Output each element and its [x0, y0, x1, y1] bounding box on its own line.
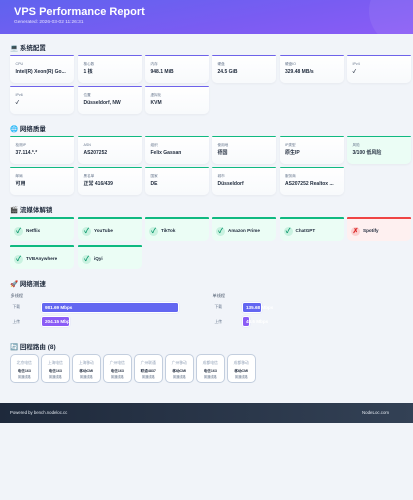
card: IP type: 原生IP	[285, 150, 300, 156]
heading: network quality: 🌐 网络质量	[10, 126, 46, 132]
bar: download: 135.68 Mbps	[246, 304, 273, 310]
card: mail: 邮局	[16, 174, 23, 178]
service: ChatGPT: ✓	[285, 228, 291, 234]
service: Amazon Prime	[212, 217, 276, 241]
route: Shanghai Telecom: 上海电信	[48, 361, 63, 365]
title: VPS Performance Report	[14, 6, 145, 18]
route: Guangzhou Telecom: 广州电信	[110, 361, 125, 365]
route: Shanghai Telecom: 电信163	[49, 368, 62, 372]
card: risk	[347, 136, 411, 164]
card: location: 位置	[84, 92, 91, 96]
service: iQiyi: iQyi	[94, 256, 103, 261]
bar: upload	[242, 316, 250, 327]
heading: speed test: 🚀 网络测速	[10, 281, 46, 288]
card: mail	[10, 166, 74, 194]
route: Chengdu Telecom: 成都电信	[203, 361, 218, 365]
service: Netflix: Netflix	[26, 228, 40, 233]
card: CPU: CPU	[16, 62, 23, 66]
label: upload: 上传	[12, 320, 20, 324]
heading: streaming unlock: 🎬 流媒体解锁	[10, 206, 52, 214]
card: usage location: 使用地	[218, 142, 228, 146]
card: country: 国家	[150, 174, 158, 178]
card: CPU	[10, 54, 74, 82]
panel: network quality	[10, 136, 411, 190]
card: organization: 组织	[150, 142, 158, 146]
card: IP type: IP类型	[285, 142, 296, 146]
card: risk: 3/100 低风险	[352, 150, 381, 156]
card: IPv4: ✓	[352, 68, 356, 74]
card: country	[145, 166, 209, 194]
card: organization: Felix Gassan	[150, 150, 181, 156]
service: Netflix: ✓	[16, 228, 21, 234]
card: blacklist: 正常 416/439	[84, 180, 113, 186]
card: disk: 硬盘	[218, 62, 225, 66]
card: test IP: 37.114.*.*	[16, 150, 37, 156]
route: Chengdu Telecom: 电信163	[204, 368, 217, 372]
card: disk	[212, 54, 276, 82]
footer credit: Powered by bench.nodeloc.cc	[10, 410, 67, 415]
panel: return routes	[10, 354, 256, 383]
label: upload: 上传	[214, 320, 222, 324]
card: virtualization	[145, 86, 209, 114]
route: Chengdu Mobile	[227, 354, 256, 382]
chart: single-thread speed	[212, 293, 273, 328]
card: disk IO	[280, 54, 344, 82]
route: Shanghai Mobile: 移动CMI	[79, 368, 93, 372]
route: Beijing Telecom: 北京电信	[17, 361, 32, 365]
card: ASN: AS207252	[84, 150, 107, 156]
footer brand: NodeLoc.com	[362, 410, 389, 415]
heading: return routes: 🔄 回程路由 (8)	[10, 344, 56, 351]
route: Shanghai Mobile	[72, 354, 100, 382]
service: Spotify blocked: ✗	[353, 228, 358, 234]
card: blacklist	[78, 166, 142, 194]
route: Guangzhou Unicom: 联通4837	[141, 368, 156, 372]
card: IPv4	[347, 54, 411, 82]
card: disk IO: 硬盘IO	[285, 62, 296, 66]
header banner	[0, 0, 413, 34]
service: Netflix	[10, 217, 74, 241]
route: Guangzhou Mobile: 移动CMI	[172, 368, 186, 372]
card: mail: 可用	[16, 180, 26, 186]
service: TVBAnywhere: TVBAnywhere	[26, 256, 57, 261]
generated date: Generated: 2026-03-02 11:26:31	[14, 20, 84, 24]
bar: download	[41, 302, 179, 312]
card: IPv6: ✓	[16, 100, 19, 106]
card: cores: 核心数	[84, 62, 94, 66]
card: IPv6: IPv6	[16, 92, 23, 96]
route: Beijing Telecom: 电信163	[18, 368, 31, 372]
card: disk IO: 329.48 MB/s	[285, 68, 314, 74]
card: location	[78, 86, 142, 114]
service: Spotify blocked	[347, 217, 411, 241]
route: Chengdu Telecom: 普通线路	[204, 374, 217, 378]
route: Guangzhou Telecom: 电信163	[111, 368, 124, 372]
card: usage location: 德国	[218, 150, 228, 156]
route: Beijing Telecom: 普通线路	[18, 374, 31, 378]
card: virtualization: 虚拟化	[150, 92, 161, 96]
service: TikTok: TikTok	[161, 228, 175, 233]
card: test IP	[10, 136, 74, 164]
card: cores	[78, 54, 142, 82]
route: Chengdu Telecom	[196, 354, 224, 382]
route: Beijing Telecom	[10, 354, 38, 382]
bar: upload	[41, 316, 70, 327]
route: Chengdu Mobile: 普通线路	[235, 374, 248, 378]
card: memory: 948.1 MiB	[150, 68, 174, 74]
route: Guangzhou Unicom: 普通线路	[142, 374, 155, 378]
card: risk: 风险	[352, 142, 360, 146]
label: single-thread: 单线程	[212, 293, 225, 298]
decorative circle	[369, 0, 413, 46]
card: city	[212, 166, 276, 194]
route: Guangzhou Mobile	[165, 354, 194, 382]
card: ASN	[78, 136, 142, 164]
route: Guangzhou Mobile: 广州移动	[172, 361, 187, 365]
card: city: 城市	[218, 174, 225, 178]
card: IP type	[280, 136, 344, 164]
card: country: DE	[150, 180, 157, 186]
card: organization	[145, 136, 209, 164]
card: location: Düsseldorf, NW	[84, 100, 121, 106]
label: multi-thread: 多线程	[10, 293, 23, 298]
service: iQiyi	[78, 245, 142, 269]
card: city: Düsseldorf	[218, 180, 244, 186]
service: YouTube: YouTube	[94, 228, 113, 233]
panel: streaming unlock	[10, 217, 411, 269]
route: Guangzhou Unicom: 广州联通	[141, 361, 156, 365]
card: memory: 内存	[150, 62, 158, 66]
route: Chengdu Mobile: 移动CMI	[234, 368, 248, 372]
route: Shanghai Mobile: 上海移动	[79, 361, 94, 365]
label: download: 下载	[12, 305, 20, 309]
card: provider: AS207252 Realtox ...	[285, 180, 334, 186]
service: TVBAnywhere: ✓	[16, 256, 21, 262]
service: iQiyi: ✓	[84, 256, 89, 262]
route: Chengdu Mobile: 成都移动	[234, 361, 249, 365]
route: Guangzhou Telecom	[103, 354, 132, 382]
card: test IP: 检测IP	[16, 142, 26, 146]
service: Amazon Prime: Amazon Prime	[228, 228, 260, 233]
chart: single-thread speed: 48.6 Mbps	[246, 319, 268, 324]
card: cores: 1 核	[84, 68, 93, 74]
footer	[0, 403, 413, 423]
route: Guangzhou Telecom: 普通线路	[111, 374, 124, 378]
service: YouTube	[78, 217, 142, 241]
service: ChatGPT	[280, 217, 344, 241]
panel: system config	[10, 55, 411, 110]
bar: download	[242, 302, 262, 312]
card: blacklist: 黑名单	[84, 174, 94, 178]
card: provider	[280, 166, 344, 194]
card: memory	[145, 54, 209, 82]
card: usage location	[212, 136, 276, 164]
card: virtualization: KVM	[150, 100, 162, 106]
route: Guangzhou Unicom	[134, 354, 162, 382]
label: download: 下载	[214, 305, 222, 309]
card: disk: 24.5 GiB	[218, 68, 238, 74]
card: provider: 服务商	[285, 174, 296, 178]
service: TVBAnywhere	[10, 245, 74, 269]
card: IPv6	[10, 86, 74, 114]
card: IPv4: IPv4	[352, 62, 360, 66]
route: Shanghai Telecom: 普通线路	[49, 374, 62, 378]
service: YouTube: ✓	[84, 228, 89, 234]
service: Spotify blocked: Spotify	[363, 228, 379, 233]
bar: download: 981.69 Mbps	[45, 304, 72, 310]
route: Guangzhou Mobile: 普通线路	[173, 374, 186, 378]
service: TikTok	[145, 217, 209, 241]
heading: system config: 💻 系统配置	[10, 44, 46, 52]
route: Shanghai Telecom	[41, 354, 70, 382]
service: ChatGPT: ChatGPT	[296, 228, 315, 233]
card: CPU: Intel(R) Xeon(R) Go...	[16, 68, 66, 74]
card: ASN: ASN	[84, 142, 91, 146]
service: TikTok: ✓	[151, 228, 156, 234]
service: Amazon Prime: ✓	[218, 228, 223, 234]
chart: multi-thread speed	[10, 293, 180, 328]
route: Shanghai Mobile: 普通线路	[80, 374, 93, 378]
